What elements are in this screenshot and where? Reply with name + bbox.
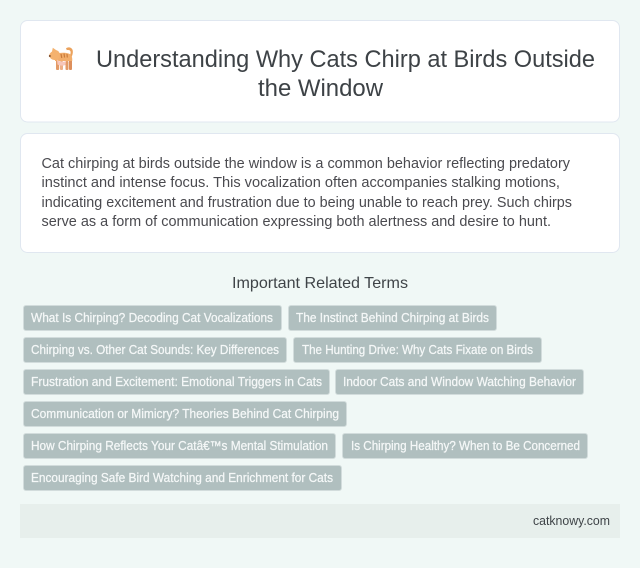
chip: other sounds — [24, 338, 286, 362]
heading: important related terms: Important Related Terms — [232, 275, 408, 292]
description paragraph: Cat chirping at birds outside the window is a common behavior reflecting predatory — [42, 156, 571, 172]
description paragraph: instinct and intense focus. This vocalization often accompanies stalking motions, — [42, 175, 560, 191]
description paragraph: indicating excitement and frustration due to being unable to reach prey. Such chirps — [42, 195, 572, 211]
chip: communication: Communication or Mimicry? Theories Behind Cat Chirping — [31, 407, 339, 421]
chip: frustration — [24, 370, 330, 394]
panel: description — [20, 134, 620, 252]
chip: mental stimulation: How Chirping Reflects Your Catâ€™s Mental Stimulation — [31, 439, 328, 453]
related terms chips — [24, 306, 588, 490]
chip: instinct: The Instinct Behind Chirping at Birds — [296, 311, 489, 325]
chip: other sounds: Chirping vs. Other Cat Sounds: Key Differences — [31, 343, 279, 357]
chip: enrichment — [24, 466, 342, 490]
title heading — [96, 46, 595, 102]
chip: frustration: Frustration and Excitement: Emotional Triggers in Cats — [31, 375, 322, 389]
footer bar — [20, 504, 620, 538]
chip: what is chirping: What Is Chirping? Decoding Cat Vocalizations — [31, 311, 273, 325]
chip: healthy — [342, 434, 588, 458]
title heading: the Window — [258, 75, 384, 102]
chip: indoor cats — [336, 370, 584, 394]
title heading: Understanding Why Cats Chirp at Birds Outside — [96, 46, 595, 73]
chip: healthy: Is Chirping Healthy? When to Be Concerned — [351, 439, 580, 453]
chip: indoor cats: Indoor Cats and Window Watching Behavior — [343, 375, 576, 389]
chip: hunting drive — [294, 338, 542, 362]
chip: what is chirping — [24, 306, 282, 330]
icon: orange cat — [49, 47, 73, 70]
panel: title card — [20, 20, 620, 122]
chip: communication — [24, 402, 346, 426]
chip: mental stimulation — [24, 434, 336, 458]
chip: hunting drive: The Hunting Drive: Why Cats Fixate on Birds — [302, 343, 533, 357]
description paragraph — [42, 156, 572, 230]
chip: enrichment: Encouraging Safe Bird Watching and Enrichment for Cats — [31, 471, 333, 485]
description paragraph: serve as a form of communication expressing both alertness and desire to hunt. — [42, 214, 551, 230]
footer site name: catknowy.com — [533, 514, 610, 528]
chip: instinct — [288, 306, 496, 330]
